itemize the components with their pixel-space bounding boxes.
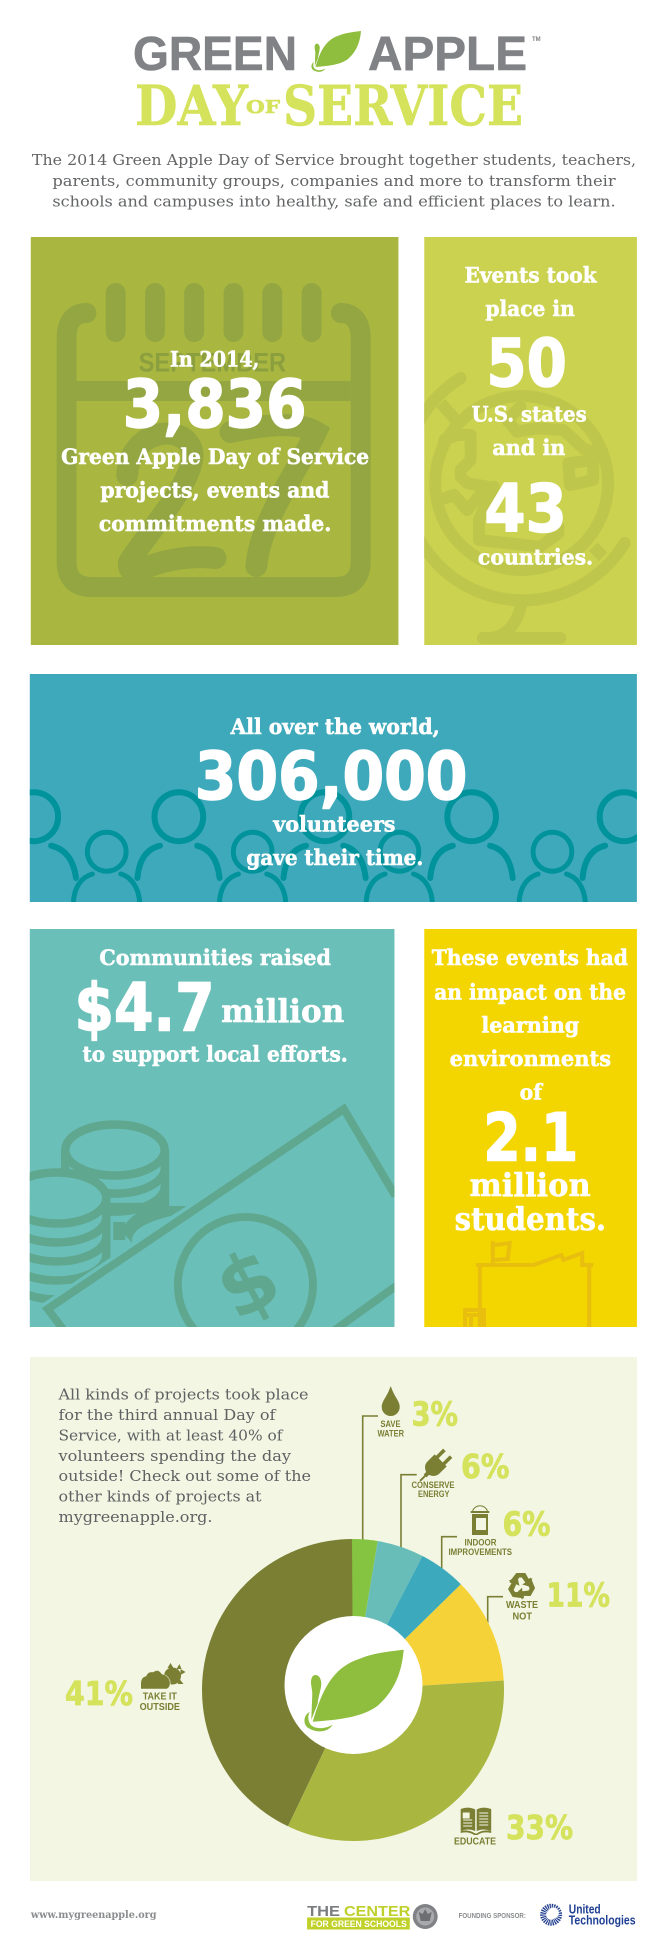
callout: save water 3%: 3% (412, 1396, 458, 1434)
icon: center leaf (304, 1650, 404, 1731)
wordmark: SERVICE: SERVICE (283, 73, 523, 138)
panel: students (424, 929, 637, 1327)
wordmark: OF: OF (246, 97, 280, 118)
text: In 2014: In 2014, (170, 347, 259, 373)
logo: The Center for Green Schools: CENTER (344, 1903, 410, 1920)
callout: save water 3%: WATER (378, 1429, 404, 1439)
text: communities raised: Communities raised (99, 946, 331, 971)
icon: open book (461, 1808, 491, 1835)
icon: recycling arrows (505, 1573, 539, 1603)
icon: electric plug (414, 1447, 454, 1487)
segment: take it outside 41% (202, 1539, 353, 1826)
callout: waste not 11%: WASTE (506, 1600, 538, 1611)
donut hole (284, 1616, 422, 1754)
number: 3,836: 3,836 (123, 367, 307, 443)
segment: waste not 11% (353, 1584, 504, 1690)
text: U.S. states and in (471, 402, 587, 461)
segment: conserve energy 6% (353, 1541, 422, 1690)
text: project description: mygreenapple.org. (58, 1510, 212, 1526)
text: projects description: Green Apple Day of Service (61, 445, 369, 470)
callout: take it outside 41% (65, 1663, 186, 1713)
number: 50: 50 (486, 326, 567, 402)
icon: calendar background: SEPTEMBER (139, 347, 286, 378)
text: all over the world: All over the world, (230, 715, 440, 740)
callout: conserve energy 6%: 6% (461, 1448, 510, 1486)
footer (30, 1902, 636, 1930)
text: events took place in: Events took (465, 263, 598, 289)
number: $4.7 million (75, 970, 344, 1047)
logo: United Technologies: United (569, 1902, 601, 1917)
trademark: TM (532, 37, 541, 43)
icon: calendar background (67, 293, 361, 587)
text: project description: volunteers spending the day (57, 1449, 292, 1465)
text: volunteers gave their time (246, 812, 423, 871)
segment: educate 33% (288, 1680, 504, 1841)
text: project description (57, 1388, 311, 1526)
logo: The Center for Green Schools: THE (307, 1903, 340, 1920)
callout: waste not 11%: NOT (512, 1611, 532, 1622)
callout: waste not 11% (505, 1573, 610, 1622)
callout: take it outside 41%: 41% (65, 1675, 133, 1713)
callout: educate 33% (454, 1808, 573, 1848)
website url: www.mygreenapple.org (30, 1910, 157, 1921)
panel: volunteers (9, 674, 648, 902)
text: events impact description: These events had (432, 946, 628, 971)
callout: conserve energy 6%: CONSERVE (412, 1480, 454, 1490)
text: U.S. states and in: and in (492, 436, 566, 461)
segment: indoor improvements 6% (353, 1556, 461, 1690)
text: project description: All kinds of projects took place (57, 1388, 308, 1404)
callout: indoor improvements 6%: 6% (502, 1506, 550, 1544)
wordmark: GREEN: GREEN (133, 28, 297, 81)
text: volunteers gave their time: gave their time. (246, 846, 423, 871)
number: $4.7 million: $4.7 (75, 970, 215, 1047)
text: million students: students. (455, 1200, 606, 1238)
callout: save water 3% (378, 1386, 458, 1439)
text: events impact description: learning (481, 1013, 579, 1039)
text: events took place in (465, 263, 598, 322)
text: project description: for the third annual Day of (58, 1408, 277, 1424)
callout: take it outside 41%: OUTSIDE (140, 1702, 180, 1713)
wordmark: DAY: DAY (135, 73, 249, 138)
text: million students (455, 1166, 606, 1238)
text: project description: outside! Check out some of the (58, 1469, 311, 1485)
text: U.S. states and in: U.S. states (471, 402, 587, 428)
panel: funds raised (30, 929, 394, 1327)
text: projects description (61, 445, 369, 537)
text: project description: Service, with at least 40% of (58, 1428, 284, 1444)
icon: paint can (471, 1506, 489, 1535)
callout: conserve energy 6% (412, 1447, 510, 1499)
callout: take it outside 41%: TAKE IT (143, 1691, 177, 1702)
callout: indoor improvements 6%: IMPROVEMENTS (448, 1547, 512, 1557)
text: events impact description: of (520, 1080, 544, 1106)
title: Green Apple Day of Service logo (133, 28, 541, 138)
icon: school building background (465, 1241, 593, 1327)
icon: crowd of people background (9, 792, 648, 901)
text: events impact description: environments (450, 1047, 611, 1072)
text: events impact description (432, 946, 628, 1106)
text: projects description: commitments made. (99, 512, 331, 537)
text: to support local efforts: to support local efforts. (82, 1042, 348, 1068)
text: million students: million (469, 1166, 591, 1204)
callout: educate 33%: 33% (506, 1809, 573, 1847)
coin stack front (7, 1172, 119, 1300)
text: events took place in: place in (485, 297, 575, 322)
logo: The Center for Green Schools: FOR GREEN SCHOOLS (311, 1919, 407, 1930)
text: volunteers gave their time: volunteers (272, 812, 395, 838)
logo: United Technologies (543, 1902, 636, 1928)
text: events impact description: an impact on the (434, 980, 626, 1006)
icon: logo leaf (311, 31, 361, 72)
panel: states and countries (404, 237, 637, 645)
donut chart (202, 1539, 504, 1841)
segment: save water 3% (352, 1539, 378, 1690)
text: projects description: projects, events and (100, 478, 329, 504)
intro text (32, 151, 636, 211)
text: countries: countries. (478, 545, 593, 571)
callout: indoor improvements 6% (448, 1506, 550, 1557)
intro text: schools and campuses into healthy, safe and efficient places to learn. (52, 192, 616, 211)
callout: waste not 11%: 11% (546, 1576, 610, 1614)
logo: United Technologies: Technologies (569, 1913, 636, 1928)
wordmark: APPLE: APPLE (368, 28, 527, 81)
callout: conserve energy 6%: ENERGY (418, 1489, 450, 1499)
number: $4.7 million: million (221, 992, 344, 1030)
icon: water drop (382, 1386, 400, 1416)
panel: 3,836 projects (31, 237, 398, 645)
intro text: parents, community groups, companies and more to transform their (52, 172, 617, 190)
banknote: $ (201, 1229, 295, 1340)
coin stack rear (65, 1124, 165, 1212)
callout: educate 33%: EDUCATE (454, 1836, 496, 1848)
callout: save water 3%: SAVE (380, 1419, 400, 1429)
number: 43: 43 (484, 471, 567, 548)
logo: The Center for Green Schools (307, 1903, 438, 1930)
intro text: The 2014 Green Apple Day of Service brought together students, teachers, (32, 151, 636, 169)
founding sponsor label: FOUNDING SPONSOR: (459, 1911, 526, 1920)
icon: coins and banknote background (30, 1104, 394, 1327)
number: 306,000: 306,000 (195, 739, 467, 815)
text: project description: other kinds of projects at (58, 1490, 262, 1506)
callout: indoor improvements 6%: INDOOR (464, 1538, 497, 1548)
leader lines (363, 1416, 503, 1629)
icon: cloud and sun (141, 1663, 186, 1689)
banknote (42, 1104, 394, 1327)
panel: project types (30, 1357, 637, 1881)
icon: globe background (404, 378, 625, 638)
number: 2.1: 2.1 (483, 1100, 578, 1177)
